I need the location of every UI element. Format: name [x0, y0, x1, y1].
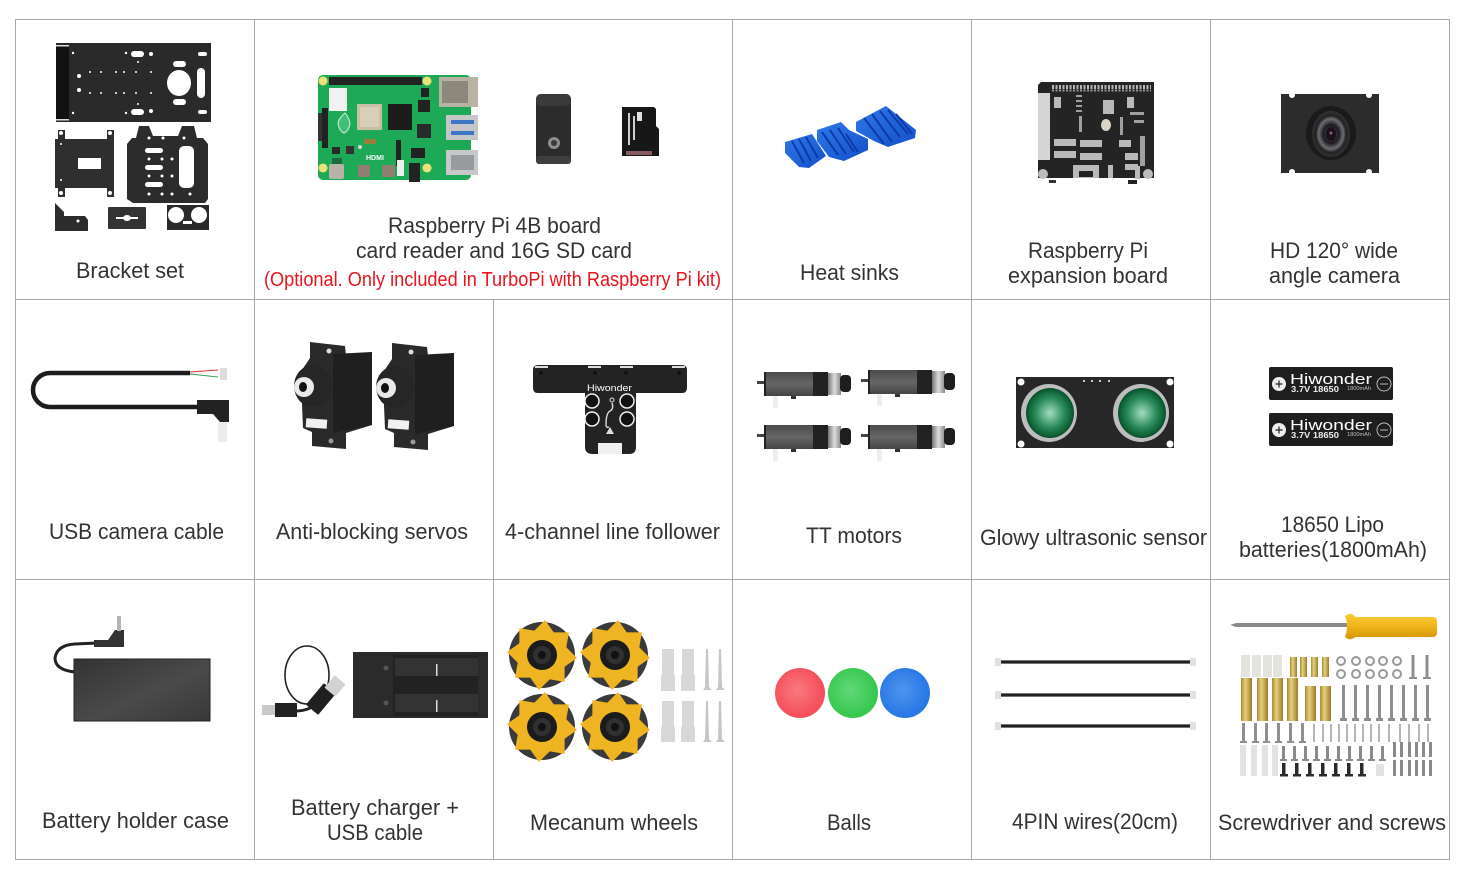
panel: Glowy ultrasonic sensor — [972, 300, 1210, 580]
label: Raspberry Pi board line: Raspberry Pi 4B board — [388, 213, 601, 238]
label: USB cable: USB cable — [327, 820, 423, 845]
label: Anti-blocking servos: Anti-blocking servos — [276, 519, 468, 544]
panel: line follower — [494, 300, 732, 580]
panel: TT motors — [732, 300, 972, 580]
panel: Raspberry Pi expansion board — [972, 20, 1210, 300]
icon: battery bottom: 1800mAh — [1347, 432, 1371, 438]
icon: expansion board — [1038, 82, 1154, 184]
panel: 4PIN wires — [972, 580, 1210, 860]
icon: camera — [1281, 92, 1379, 175]
label: card reader line: card reader and 16G SD card — [356, 238, 632, 263]
icon: battery bottom: Hiwonder — [1290, 417, 1372, 434]
icon: USB cable — [262, 646, 346, 717]
icon: battery case — [55, 616, 210, 721]
label: TT motors: TT motors — [806, 523, 902, 548]
icon: wheels — [507, 620, 650, 762]
icon: battery bottom — [1269, 413, 1393, 446]
icon: battery bottom: 3.7V 18650 — [1291, 431, 1340, 440]
panel: USB camera cable — [16, 300, 254, 580]
panel: Raspberry Pi 4B kit — [254, 20, 732, 300]
panel: Bracket set — [16, 20, 254, 300]
icon: heat sinks — [785, 106, 916, 168]
panel: Balls — [732, 580, 972, 860]
icon: Raspberry Pi 4B board: HDMI — [366, 155, 384, 162]
label: Mecanum wheels: Mecanum wheels — [530, 810, 698, 835]
label: Bracket set: Bracket set — [76, 258, 184, 283]
icon: line follower: Hiwonder — [587, 383, 632, 393]
note: optional kit: (Optional. Only included in TurboPi with Raspberry Pi kit) — [264, 269, 721, 291]
icon: battery top: Hiwonder — [1290, 371, 1372, 388]
panel: Anti-blocking servos — [254, 300, 494, 580]
icon: screwdriver — [1230, 614, 1437, 639]
icon: SD card — [622, 107, 659, 156]
label: USB camera cable: USB camera cable — [49, 519, 224, 544]
icon: card reader — [536, 94, 571, 164]
icon: battery top — [1269, 367, 1393, 400]
icon: anchors and screws — [661, 649, 725, 742]
panel: Mecanum wheels — [494, 580, 732, 860]
panel: Screwdriver and screws — [1210, 580, 1450, 860]
label: Glowy ultrasonic sensor: Glowy ultrasonic sensor — [980, 525, 1207, 550]
panel: Battery holder case — [16, 580, 254, 860]
label: Balls: Balls — [827, 810, 871, 835]
label: 4PIN wires(20cm): 4PIN wires(20cm) — [1012, 809, 1178, 834]
icon: bracket set — [55, 43, 211, 231]
label: Heat sinks: Heat sinks — [800, 260, 899, 285]
icon: Raspberry Pi 4B board — [318, 75, 478, 182]
icon: battery top: 1800mAh — [1347, 386, 1371, 392]
panel: 18650 batteries — [1210, 300, 1450, 580]
icon: line follower — [533, 365, 687, 454]
label: 4-channel line follower: 4-channel line follower — [505, 519, 720, 544]
icon: battery top: 3.7V 18650 — [1291, 385, 1340, 394]
label: angle camera: angle camera — [1269, 263, 1401, 288]
label: expansion board: expansion board — [1008, 263, 1168, 288]
icon: servos — [294, 342, 454, 450]
label: batteries(1800mAh): batteries(1800mAh) — [1239, 537, 1427, 562]
icon: ultrasonic sensor — [1016, 377, 1174, 448]
label: 18650 Lipo: 18650 Lipo — [1281, 512, 1384, 537]
icon: battery charger — [353, 652, 488, 718]
label: Raspberry Pi: Raspberry Pi — [1028, 238, 1148, 263]
icon: wires — [995, 658, 1196, 730]
label: Screwdriver and screws: Screwdriver and screws — [1218, 810, 1446, 835]
label: HD 120° wide: HD 120° wide — [1270, 238, 1398, 263]
icon: screws — [1240, 655, 1432, 776]
label: Battery charger +: Battery charger + — [291, 795, 459, 820]
icon: balls — [775, 668, 930, 718]
label: Battery holder case: Battery holder case — [42, 808, 229, 833]
panel: HD camera — [1210, 20, 1450, 300]
icon: TT motors — [757, 370, 955, 461]
icon: USB cable — [33, 368, 229, 442]
panel: Battery charger — [254, 580, 494, 860]
panel: Heat sinks — [732, 20, 972, 300]
